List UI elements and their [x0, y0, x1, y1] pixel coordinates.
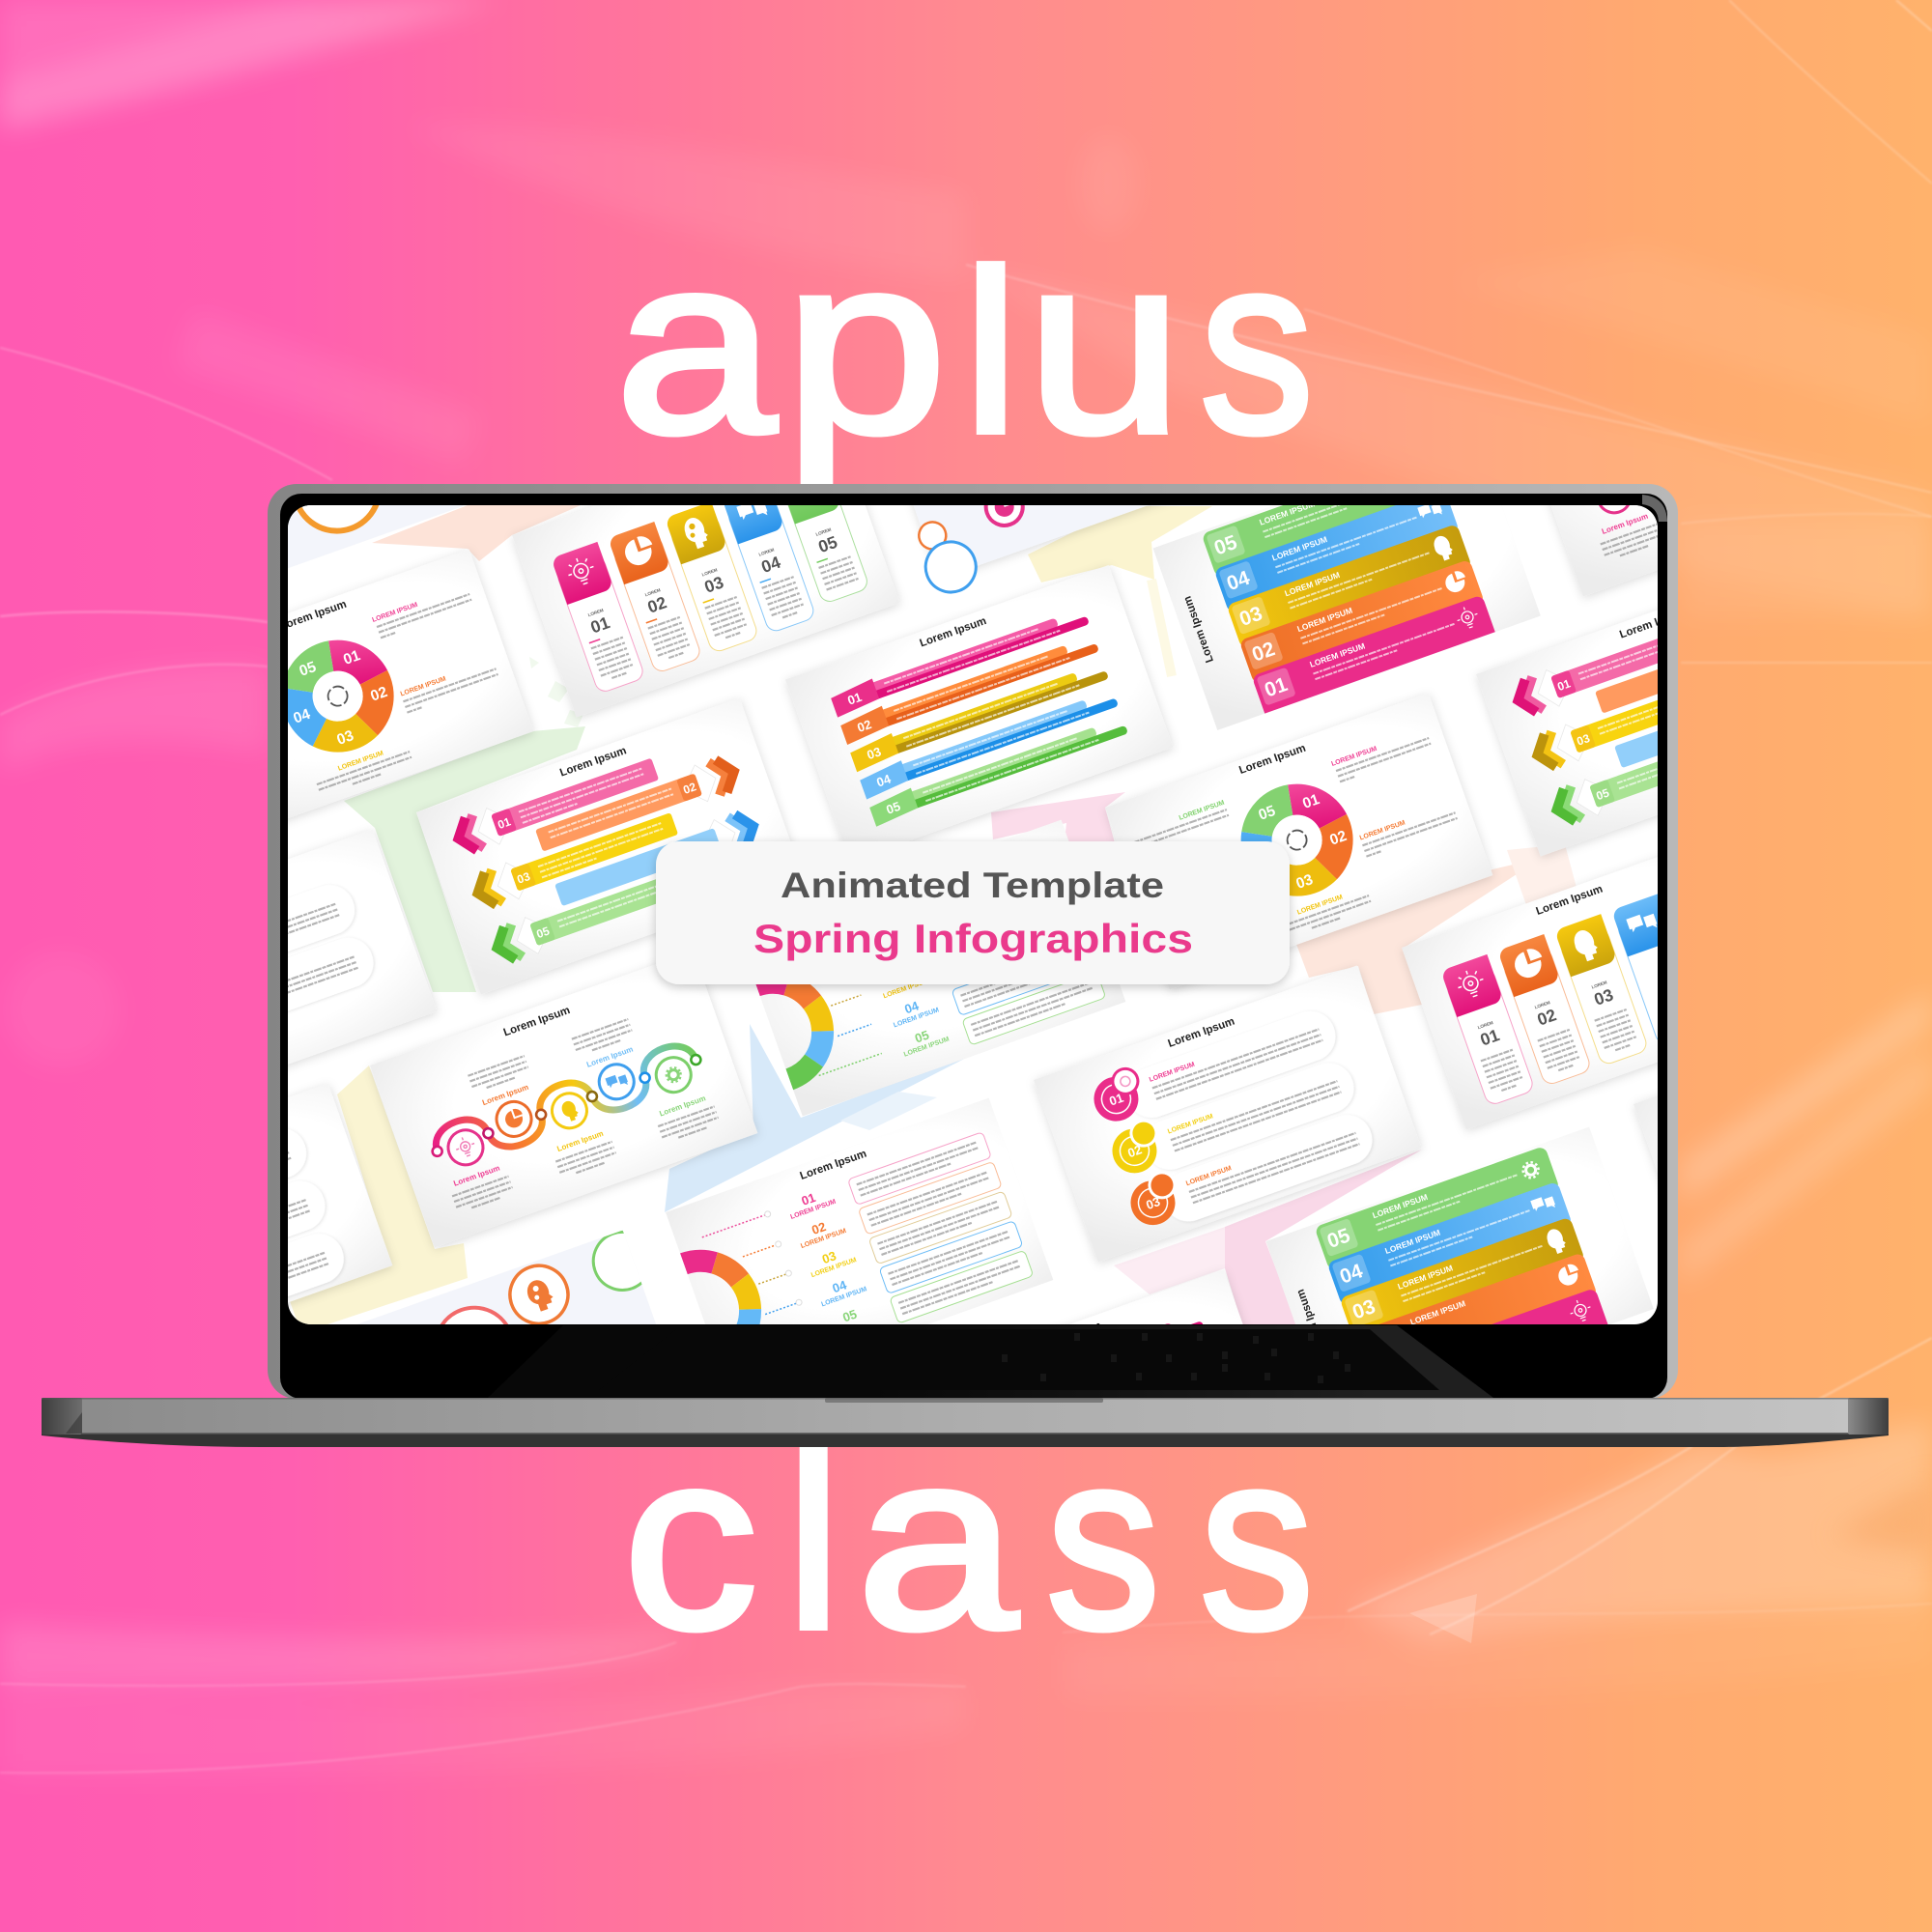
slide: wheel infographic left: LOREM IPSUM: [219, 656, 267, 678]
bar 04: 04: [1337, 1260, 1366, 1289]
badge 02: 02: [1125, 1142, 1144, 1160]
slide: pale bubble slide with orange ring: [288, 505, 463, 568]
slide: arrows left: 05: [534, 923, 552, 941]
bar 01: [1252, 595, 1498, 722]
slide: wheel infographic left: 04: [292, 706, 313, 727]
ribbon 01: [830, 604, 1091, 718]
slide: donut list lower centre: LOREM IPSUM: [820, 1286, 868, 1308]
bar 05: [1202, 453, 1447, 578]
keyboard reflection on bezel: [488, 1325, 1493, 1398]
slide: donut list behind card: LOREM IPSUM: [903, 1036, 951, 1059]
title: class: s: [1046, 1399, 1160, 1682]
slide: ribbons bottom centre: [900, 1269, 1288, 1567]
slide: wheel infographic centre: LOREM IPSUM: [1330, 746, 1378, 768]
slide: wheel infographic left: 05: [298, 659, 319, 680]
slide: three-row pills centre right: LOREM IPSUM: [1149, 1062, 1196, 1084]
bar 04: LOREM IPSUM: [1383, 1228, 1441, 1256]
slide: ribbons bottom centre: Lorem Ipsum: [1034, 1321, 1103, 1354]
badge 01: [1087, 1065, 1150, 1127]
slide: ribbons: [785, 565, 1173, 862]
bar 03: [1340, 1217, 1585, 1342]
card 03: [1554, 914, 1649, 1066]
laptop screen: collage of slides: [288, 505, 1658, 1324]
slide: five cards top: [512, 505, 901, 721]
card 04: [722, 481, 816, 634]
ribbon 01: 01: [845, 690, 864, 708]
slide: donut list behind card: 05: [913, 1028, 931, 1046]
title: class: a: [856, 1399, 1019, 1682]
slide: donut list behind card: [738, 819, 1125, 1117]
slide: wheel infographic centre: [1105, 693, 1492, 990]
slide: arrows left: 03: [515, 869, 532, 887]
bar 01: [1365, 1288, 1611, 1415]
bar 04: [1327, 1181, 1573, 1306]
ribbon 03: 03: [865, 744, 883, 762]
slide: ribbons: Lorem Ipsum: [919, 615, 988, 649]
slide: donut list behind card: 04: [902, 998, 922, 1016]
slide: three-row pills centre right: LOREM IPSUM: [1185, 1165, 1233, 1187]
slide: wheel infographic left: 03: [335, 727, 356, 749]
laptop black bezel: [280, 494, 1667, 1399]
slide: arrows left: 02: [681, 780, 698, 797]
slide: wave timeline: Lorem Ipsum: [658, 1094, 707, 1119]
slide: arrows right: 01: [1555, 676, 1573, 694]
chevrons: [453, 728, 769, 964]
card heading: Animated Template: Animated Template: [781, 866, 1164, 905]
card 01: 01: [1478, 1025, 1502, 1050]
slide: wheel infographic centre: LOREM IPSUM: [1296, 894, 1344, 917]
slide: donut list behind card: LOREM IPSUM: [882, 978, 930, 1000]
slide: wheel infographic centre: 05: [1257, 803, 1278, 824]
title: aplus: s: [1200, 203, 1314, 486]
slide: wave timeline: Lorem Ipsum: [502, 1005, 572, 1038]
bar 03: LOREM IPSUM: [1396, 1263, 1454, 1292]
card 02: LOREM: [644, 587, 661, 597]
card 04: [1611, 894, 1706, 1046]
card 02: LOREM: [1534, 1000, 1550, 1009]
bar 05: LOREM IPSUM: [1258, 498, 1316, 527]
slide: wheel infographic left: 02: [368, 684, 389, 705]
slide: wheel infographic left: LOREM IPSUM: [337, 750, 384, 773]
slide: donut list lower centre: Lorem Ipsum: [799, 1149, 868, 1182]
centre label card: [656, 841, 1290, 984]
bar 03: LOREM IPSUM: [1283, 570, 1341, 598]
slide: wave top right: [1519, 299, 1906, 597]
bar 03: [1227, 524, 1472, 649]
slide: donut list lower centre: LOREM IPSUM: [810, 1257, 858, 1279]
card 01: [551, 542, 645, 694]
card 02: 02: [1535, 1005, 1559, 1030]
card heading: Spring Infographics: Spring Infographics: [753, 916, 1193, 961]
wave icons: [440, 1040, 696, 1171]
slide: stacked bars top: [1153, 434, 1544, 739]
slide: wave timeline: Lorem Ipsum: [585, 1044, 634, 1069]
bar 04: LOREM IPSUM: [1270, 534, 1328, 563]
slide: wheel infographic centre: Lorem Ipsum: [1237, 743, 1307, 777]
title: class: s: [1200, 1399, 1314, 1682]
bar 05: 05: [1211, 531, 1240, 559]
pastel colour bands behind slides: [290, 505, 1580, 1333]
slide: wheel infographic left: Lorem Ipsum: [278, 599, 348, 633]
badge 03: [1123, 1169, 1186, 1231]
bar 05: [1315, 1146, 1560, 1271]
card 04: LOREM: [758, 547, 775, 557]
slide: arrows left: 01: [496, 814, 513, 832]
badge 03: 03: [1144, 1194, 1162, 1212]
slide: wave timeline: Lorem Ipsum: [481, 1083, 529, 1107]
badge 02: [1105, 1118, 1168, 1179]
slide: three-row pills centre right: LOREM IPSUM: [1167, 1113, 1214, 1135]
ribbon 02: 02: [855, 717, 873, 735]
slide: five cards lower right: [1402, 833, 1789, 1130]
slide: wheel infographic centre: LOREM IPSUM: [1359, 819, 1406, 842]
card 04: 04: [758, 553, 783, 577]
bar 04: [1214, 488, 1460, 613]
slide: three-row pills centre right: Lorem Ipsum: [1167, 1016, 1236, 1050]
ribbon 04: [859, 686, 1120, 799]
bar 02: LOREM IPSUM: [1408, 1298, 1466, 1327]
bar 03: 03: [1350, 1295, 1378, 1323]
card 05: 05: [815, 532, 840, 556]
bar 02: [1239, 559, 1485, 685]
slide: pills left top: [49, 829, 437, 1126]
slide: wheel infographic left: 01: [341, 647, 363, 668]
slide: donut list lower centre: 02: [810, 1219, 828, 1237]
card 01: 01: [588, 612, 612, 638]
slide: donut list lower centre: 05: [840, 1307, 859, 1324]
slide: donut list lower centre: 03: [820, 1248, 838, 1266]
slide: wheel infographic centre: LOREM IPSUM: [1179, 800, 1226, 822]
laptop lid frame: [268, 484, 1678, 1399]
chevrons: [1513, 677, 1582, 826]
card 01: LOREM: [1477, 1020, 1494, 1030]
bar 05: 05: [1324, 1224, 1353, 1253]
card 02: [608, 522, 702, 674]
ribbon 02: [839, 632, 1100, 745]
card 03: LOREM: [1591, 980, 1607, 990]
slide: wheel infographic left: [288, 549, 535, 824]
card 05: LOREM: [815, 527, 832, 537]
card 03: LOREM: [701, 567, 718, 578]
bar 05: LOREM IPSUM: [1371, 1192, 1429, 1220]
slide: five cards lower right: Lorem Ipsum: [1535, 884, 1605, 918]
slide: wave timeline: Lorem Ipsum: [555, 1129, 605, 1153]
slide: wheel infographic left: LOREM IPSUM: [371, 602, 419, 624]
slide: wave top right: Lorem Ipsum: [1601, 512, 1649, 536]
bar 02: [1352, 1252, 1598, 1378]
slide: pale bubble slide with pink circle: [910, 505, 1163, 594]
slide: donut list behind card: LOREM IPSUM: [893, 1007, 940, 1029]
slide: blank edge bottom right: [1634, 989, 1932, 1287]
card 02: 02: [645, 592, 669, 617]
card 03: 03: [702, 572, 726, 597]
slide: pale bubbles bottom left: [299, 1224, 704, 1527]
ribbon 04: 04: [874, 771, 894, 790]
wave nodes: [431, 1054, 702, 1157]
slide: stacked bars bottom: [1265, 1126, 1657, 1432]
bar 01: LOREM IPSUM: [1308, 640, 1366, 669]
title: aplus: u: [1026, 203, 1182, 486]
slide: stacked bars top: Lorem Ipsum: [1182, 594, 1216, 664]
card 03: [665, 501, 759, 654]
slide: arrows left: [416, 697, 804, 995]
slide: pills lower left: [5, 1083, 392, 1380]
slide: donut list lower centre: [666, 1097, 1053, 1395]
slide: stacked bars bottom: Lorem Ipsum: [1295, 1288, 1329, 1357]
slide: wave timeline: Lorem Ipsum: [452, 1164, 501, 1188]
slide: arrows left: Lorem Ipsum: [558, 745, 628, 780]
slide: wheel infographic centre: 02: [1327, 828, 1349, 849]
slide: arrows right: 03: [1575, 731, 1592, 749]
laptop base: [42, 1398, 1889, 1447]
badge 01: 01: [1107, 1091, 1125, 1109]
slide: wheel infographic centre: 03: [1294, 871, 1316, 893]
card 05: [779, 461, 869, 604]
card 03: 03: [1592, 984, 1616, 1009]
bar 02: 02: [1249, 638, 1278, 667]
slide: donut list lower centre: LOREM IPSUM: [789, 1199, 837, 1221]
slide: arrows right: Lorem Ipsum: [1618, 607, 1688, 641]
slide: wheel infographic left: LOREM IPSUM: [400, 675, 447, 698]
title: class: l: [785, 1399, 841, 1682]
slide: donut list lower centre: LOREM IPSUM: [800, 1228, 847, 1250]
slide: arrows right: [1476, 559, 1863, 857]
slide: wave timeline: [370, 951, 757, 1248]
title: aplus: a: [614, 203, 778, 486]
slide: donut list lower centre: 04: [831, 1277, 849, 1295]
slide: wheel infographic centre: 01: [1300, 791, 1322, 812]
card 01: [1440, 954, 1535, 1106]
ribbon 03: [849, 659, 1110, 772]
ribbon 05: [868, 713, 1129, 827]
bar 04: 04: [1224, 567, 1253, 595]
title: aplus: p: [784, 203, 948, 487]
card 02: [1497, 934, 1592, 1087]
title: aplus: l: [962, 222, 1019, 481]
slide: donut list lower centre: 01: [800, 1190, 817, 1208]
title: class: c: [623, 1399, 757, 1682]
slide: three-row pills centre right: [1034, 965, 1421, 1263]
slide: arrows right: 05: [1594, 785, 1611, 803]
bar 02: LOREM IPSUM: [1295, 606, 1353, 634]
slide: donut list behind card: 03: [893, 969, 910, 987]
ribbon 05: 05: [884, 799, 902, 817]
bar 03: 03: [1236, 602, 1265, 631]
bar 01: 01: [1262, 673, 1291, 701]
card 01: LOREM: [587, 608, 605, 617]
